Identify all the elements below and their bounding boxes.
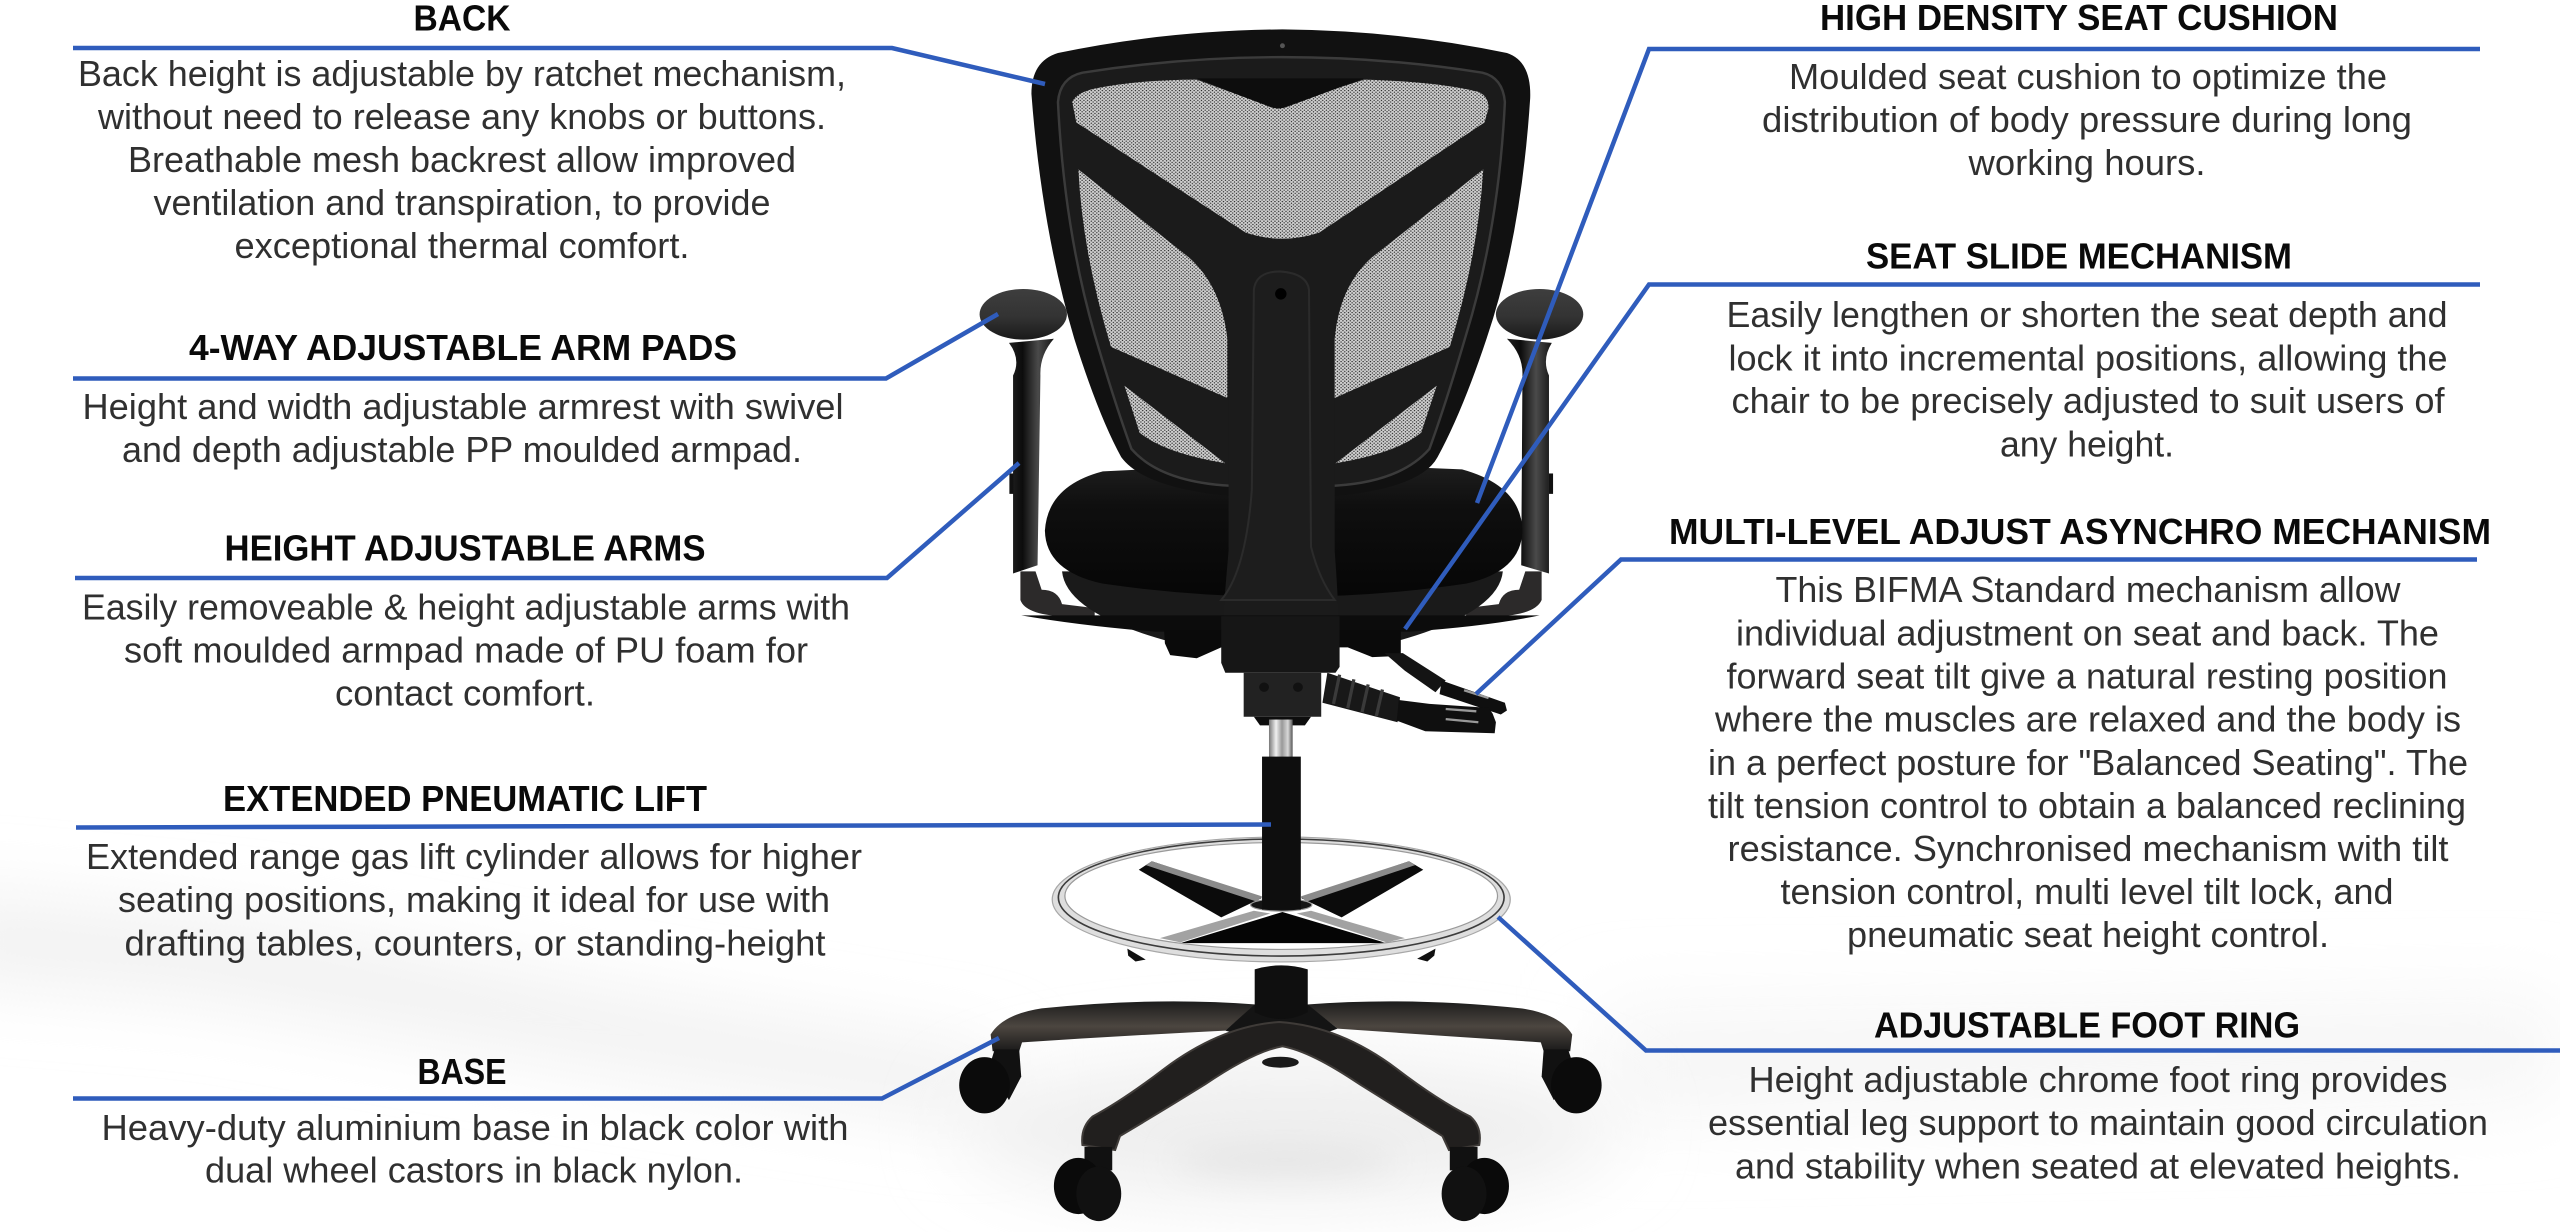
left arm <box>980 289 1095 624</box>
panel: seat cushion <box>1477 0 2480 503</box>
text: asynchro: individual adjustment on seat and back. The <box>1736 612 2439 654</box>
back hole <box>1280 43 1285 48</box>
lower chair: mechanism, lift, ring and base <box>959 615 1602 1221</box>
text: asynchro: resistance. Synchronised mechanism with tilt <box>1728 828 2448 869</box>
leader line: back <box>73 48 1045 84</box>
text: seat cushion <box>1762 56 2412 183</box>
foot ring <box>1052 837 1511 962</box>
panel: arm pads <box>73 314 998 470</box>
castor front right <box>1442 1147 1509 1221</box>
leader line: seat cushion <box>1477 49 2480 503</box>
text: foot ring: Height adjustable chrome foot ring provides <box>1748 1059 2448 1100</box>
heading: seat slide: SEAT SLIDE MECHANISM <box>1866 236 2292 276</box>
leader line: foot ring <box>1498 917 2560 1050</box>
column sleeve <box>1255 965 1308 1019</box>
text: arm pads: and depth adjustable PP moulded armpad. <box>122 429 802 470</box>
text: asynchro: pneumatic seat height control. <box>1847 914 2329 955</box>
text: arms <box>82 586 850 714</box>
text: asynchro <box>1708 569 2468 955</box>
panel: base <box>73 1038 999 1190</box>
castor back left <box>959 1049 1021 1113</box>
castor back right <box>1542 1049 1602 1113</box>
leader line: base <box>73 1038 999 1098</box>
ring cross legs <box>1127 861 1436 962</box>
text: lift <box>86 836 862 964</box>
text: seat slide: Easily lengthen or shorten the seat depth and <box>1726 294 2448 335</box>
text: lift: seating positions, making it ideal for use with <box>118 879 830 920</box>
text: foot ring: and stability when seated at elevated heights. <box>1735 1146 2461 1186</box>
mesh panels <box>1072 78 1489 463</box>
text: arms: contact comfort. <box>335 672 595 714</box>
control block <box>1221 616 1340 673</box>
panel: foot ring <box>1498 917 2560 1186</box>
levers <box>1322 653 1507 733</box>
chrome rod <box>1269 720 1293 759</box>
heading: foot ring: ADJUSTABLE FOOT RING <box>1874 1004 2300 1046</box>
text: asynchro: where the muscles are relaxed and the body is <box>1714 698 2461 740</box>
text: lift: drafting tables, counters, or standing-height <box>124 922 826 964</box>
text: asynchro: tension control, multi level tilt lock, and <box>1780 871 2394 912</box>
seat plate <box>1021 615 1540 632</box>
text: back: without need to release any knobs or buttons. <box>97 96 826 137</box>
leader line: lift <box>76 824 1271 828</box>
text: back: Back height is adjustable by ratchet mechanism, <box>78 53 846 94</box>
five star base <box>991 1001 1572 1150</box>
leader line: seat slide <box>1405 284 2480 629</box>
text: asynchro: tilt tension control to obtain a balanced reclining <box>1708 785 2466 826</box>
text: asynchro: This BIFMA Standard mechanism allow <box>1776 569 2401 610</box>
text: back: exceptional thermal comfort. <box>234 225 690 266</box>
text: base: dual wheel castors in black nylon. <box>205 1150 743 1190</box>
text: seat cushion: Moulded seat cushion to optimize the <box>1789 56 2387 97</box>
castor front left <box>1054 1147 1121 1221</box>
text: seat slide: lock it into incremental positions, allowing the <box>1728 338 2448 378</box>
right arm <box>1466 289 1583 624</box>
gas cylinder <box>1262 757 1301 910</box>
upper chair: arms, back and seat <box>980 29 1583 640</box>
chair illustration <box>959 29 1602 1221</box>
leader line: arms <box>75 463 1019 578</box>
seat tray <box>1062 571 1503 640</box>
text: seat cushion: distribution of body pressure during long <box>1762 99 2412 140</box>
leader line: arm pads <box>73 314 998 378</box>
spine block <box>1221 398 1340 640</box>
panel: height adjustable arms <box>75 463 1019 714</box>
text: seat slide: chair to be precisely adjusted to suit users of <box>1732 380 2445 421</box>
spine <box>1221 271 1335 600</box>
text: base: Heavy-duty aluminium base in black color with <box>102 1107 849 1148</box>
floor shadows <box>0 900 2560 1200</box>
panel: asynchro mechanism <box>1476 511 2491 955</box>
text: arms: soft moulded armpad made of PU foam for <box>124 630 808 670</box>
text: foot ring <box>1708 1059 2488 1186</box>
text: back <box>78 53 846 266</box>
panel: pneumatic lift <box>76 778 1271 964</box>
heading: arms: HEIGHT ADJUSTABLE ARMS <box>224 528 706 568</box>
heading: arm pads: 4-WAY ADJUSTABLE ARM PADS <box>189 327 737 368</box>
text: arm pads <box>82 386 844 470</box>
text: base <box>102 1107 849 1190</box>
text: back: Breathable mesh backrest allow improved <box>128 139 796 180</box>
text: asynchro: forward seat tilt give a natural resting position <box>1726 656 2448 696</box>
panel: back <box>73 0 1045 266</box>
text: back: ventilation and transpiration, to provide <box>154 182 770 223</box>
text: seat cushion: working hours. <box>1967 142 2206 183</box>
text: seat slide: any height. <box>2000 424 2174 464</box>
seat cushion <box>1045 466 1522 597</box>
text: lift: Extended range gas lift cylinder allows for higher <box>86 836 862 877</box>
mechanism plate <box>1164 630 1401 658</box>
text: seat slide <box>1726 294 2448 464</box>
text: asynchro: in a perfect posture for "Balanced Seating". The <box>1708 742 2468 783</box>
backrest frame <box>1031 29 1530 496</box>
text: foot ring: essential leg support to maintain good circulation <box>1708 1102 2488 1143</box>
heading: base: BASE <box>418 1051 506 1092</box>
leader line: asynchro <box>1476 560 2477 694</box>
heading: asynchro: MULTI-LEVEL ADJUST ASYNCHRO MECHANISM <box>1669 511 2491 552</box>
text: arm pads: Height and width adjustable armrest with swivel <box>82 386 844 427</box>
panel: seat slide <box>1405 236 2480 629</box>
text: arms: Easily removeable & height adjustable arms with <box>82 586 850 628</box>
heading: lift: EXTENDED PNEUMATIC LIFT <box>223 778 707 819</box>
